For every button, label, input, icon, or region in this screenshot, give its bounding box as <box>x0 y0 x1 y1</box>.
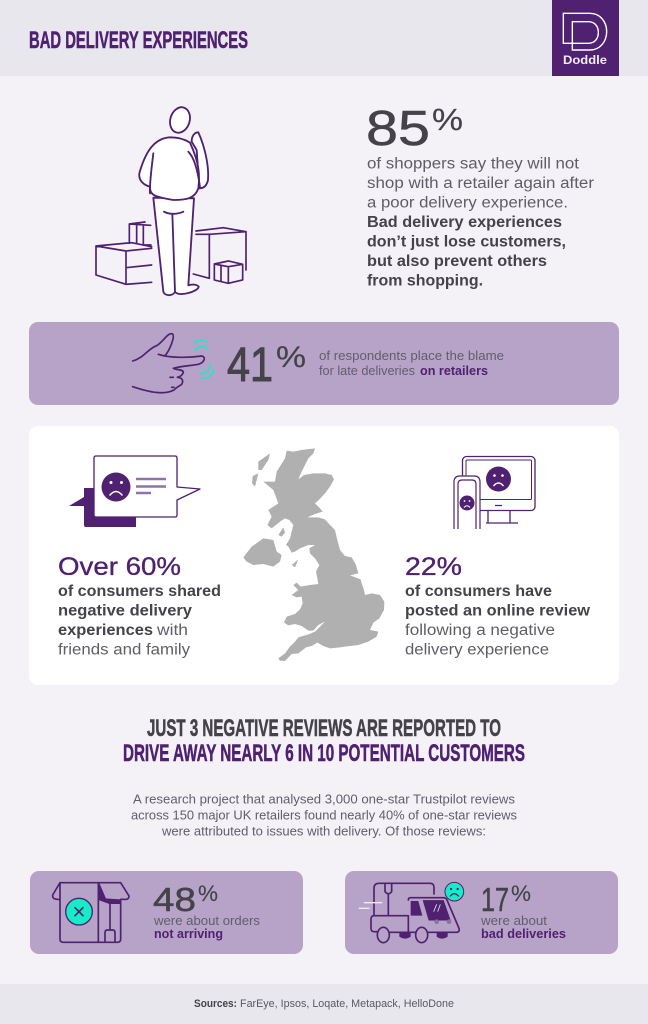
stat: 22% <box>405 553 591 658</box>
48% text <box>153 913 261 941</box>
panel: 48% not arriving: % <box>198 881 218 906</box>
48% text: not arriving <box>154 926 223 941</box>
stat: over 60%: experiences <box>58 622 153 639</box>
logo: Doddle: Doddle <box>563 55 607 67</box>
header band <box>0 0 648 76</box>
footer: sources <box>0 984 648 1024</box>
panel: white UK panel <box>29 426 619 685</box>
panel: 48% not arriving <box>30 871 303 954</box>
17% text <box>480 913 566 941</box>
person figure <box>139 105 208 295</box>
stat text: shop with a retailer again after <box>367 175 594 192</box>
blame text <box>319 348 504 378</box>
icon: monitor and phone with sad faces <box>454 456 535 529</box>
stat: 22%: of consumers have <box>405 583 552 600</box>
footer: sources: Sources: <box>194 998 237 1010</box>
blame text: on retailers <box>420 363 488 378</box>
stat: 22%: 22% <box>405 553 462 581</box>
stat text <box>367 156 594 290</box>
boxes behind person <box>96 222 246 284</box>
stat: 85% <box>366 102 594 290</box>
icon: open parcel with cross <box>53 883 129 942</box>
stat: over 60%: negative delivery <box>58 602 192 620</box>
stat: 22%: posted an online review <box>405 602 591 620</box>
17% text: were about <box>480 913 547 928</box>
panel: 17% bad deliveries: % <box>511 881 531 906</box>
panel: 41% blame <box>29 322 619 405</box>
research paragraph <box>131 792 517 838</box>
map of the UK <box>243 448 384 661</box>
stat text: from shopping. <box>367 272 483 290</box>
stat: over 60%: friends and family <box>58 642 190 658</box>
logo: Doddle <box>552 0 619 76</box>
icon: delivery truck with sad face <box>359 882 464 943</box>
stat: 41%: 41 <box>227 339 273 392</box>
stat: 17%: 17 <box>481 881 509 918</box>
research paragraph: across 150 major UK retailers found nearly 40% of one-star reviews <box>131 808 517 822</box>
footer: sources: FarEye, Ipsos, Loqate, Metapack, HelloDone <box>240 998 454 1010</box>
stat: over 60%: with <box>156 622 188 639</box>
stat text: don’t just lose customers, <box>367 234 566 250</box>
stat: 48%: 48 <box>153 881 196 918</box>
blame text: of respondents place the blame <box>319 348 504 363</box>
panel: 41% blame: % <box>276 341 306 374</box>
stat: over 60%: Over 60% <box>58 553 181 581</box>
stat text: of shoppers say they will not <box>367 156 580 172</box>
icon: person looking at parcels <box>96 105 246 295</box>
stat text: a poor delivery experience. <box>367 194 568 212</box>
stat: over 60%: of consumers shared <box>58 583 221 600</box>
stat text: but also prevent others <box>367 253 547 270</box>
17% text: bad deliveries <box>481 926 566 941</box>
panel: 17% bad deliveries <box>345 871 618 954</box>
stat: 22%: following a negative <box>405 622 555 639</box>
stat: 22%: delivery experience <box>405 642 549 658</box>
research paragraph: A research project that analysed 3,000 one-star Trustpilot reviews <box>133 792 515 806</box>
stat text: Bad delivery experiences <box>367 214 562 231</box>
icon: pointing hand <box>133 334 214 393</box>
stat: over 60% <box>58 553 221 658</box>
title: BAD DELIVERY EXPERIENCES <box>29 27 248 54</box>
icon: speech bubble with sad face <box>69 456 200 527</box>
blame text: for late deliveries <box>319 363 415 378</box>
heading: negative reviews <box>123 715 525 767</box>
stat: 85%: 85 <box>366 102 430 156</box>
stat: 85%: % <box>432 102 463 137</box>
research paragraph: were attributed to issues with delivery. Of those reviews: <box>161 824 486 838</box>
48% text: were about orders <box>153 913 261 928</box>
